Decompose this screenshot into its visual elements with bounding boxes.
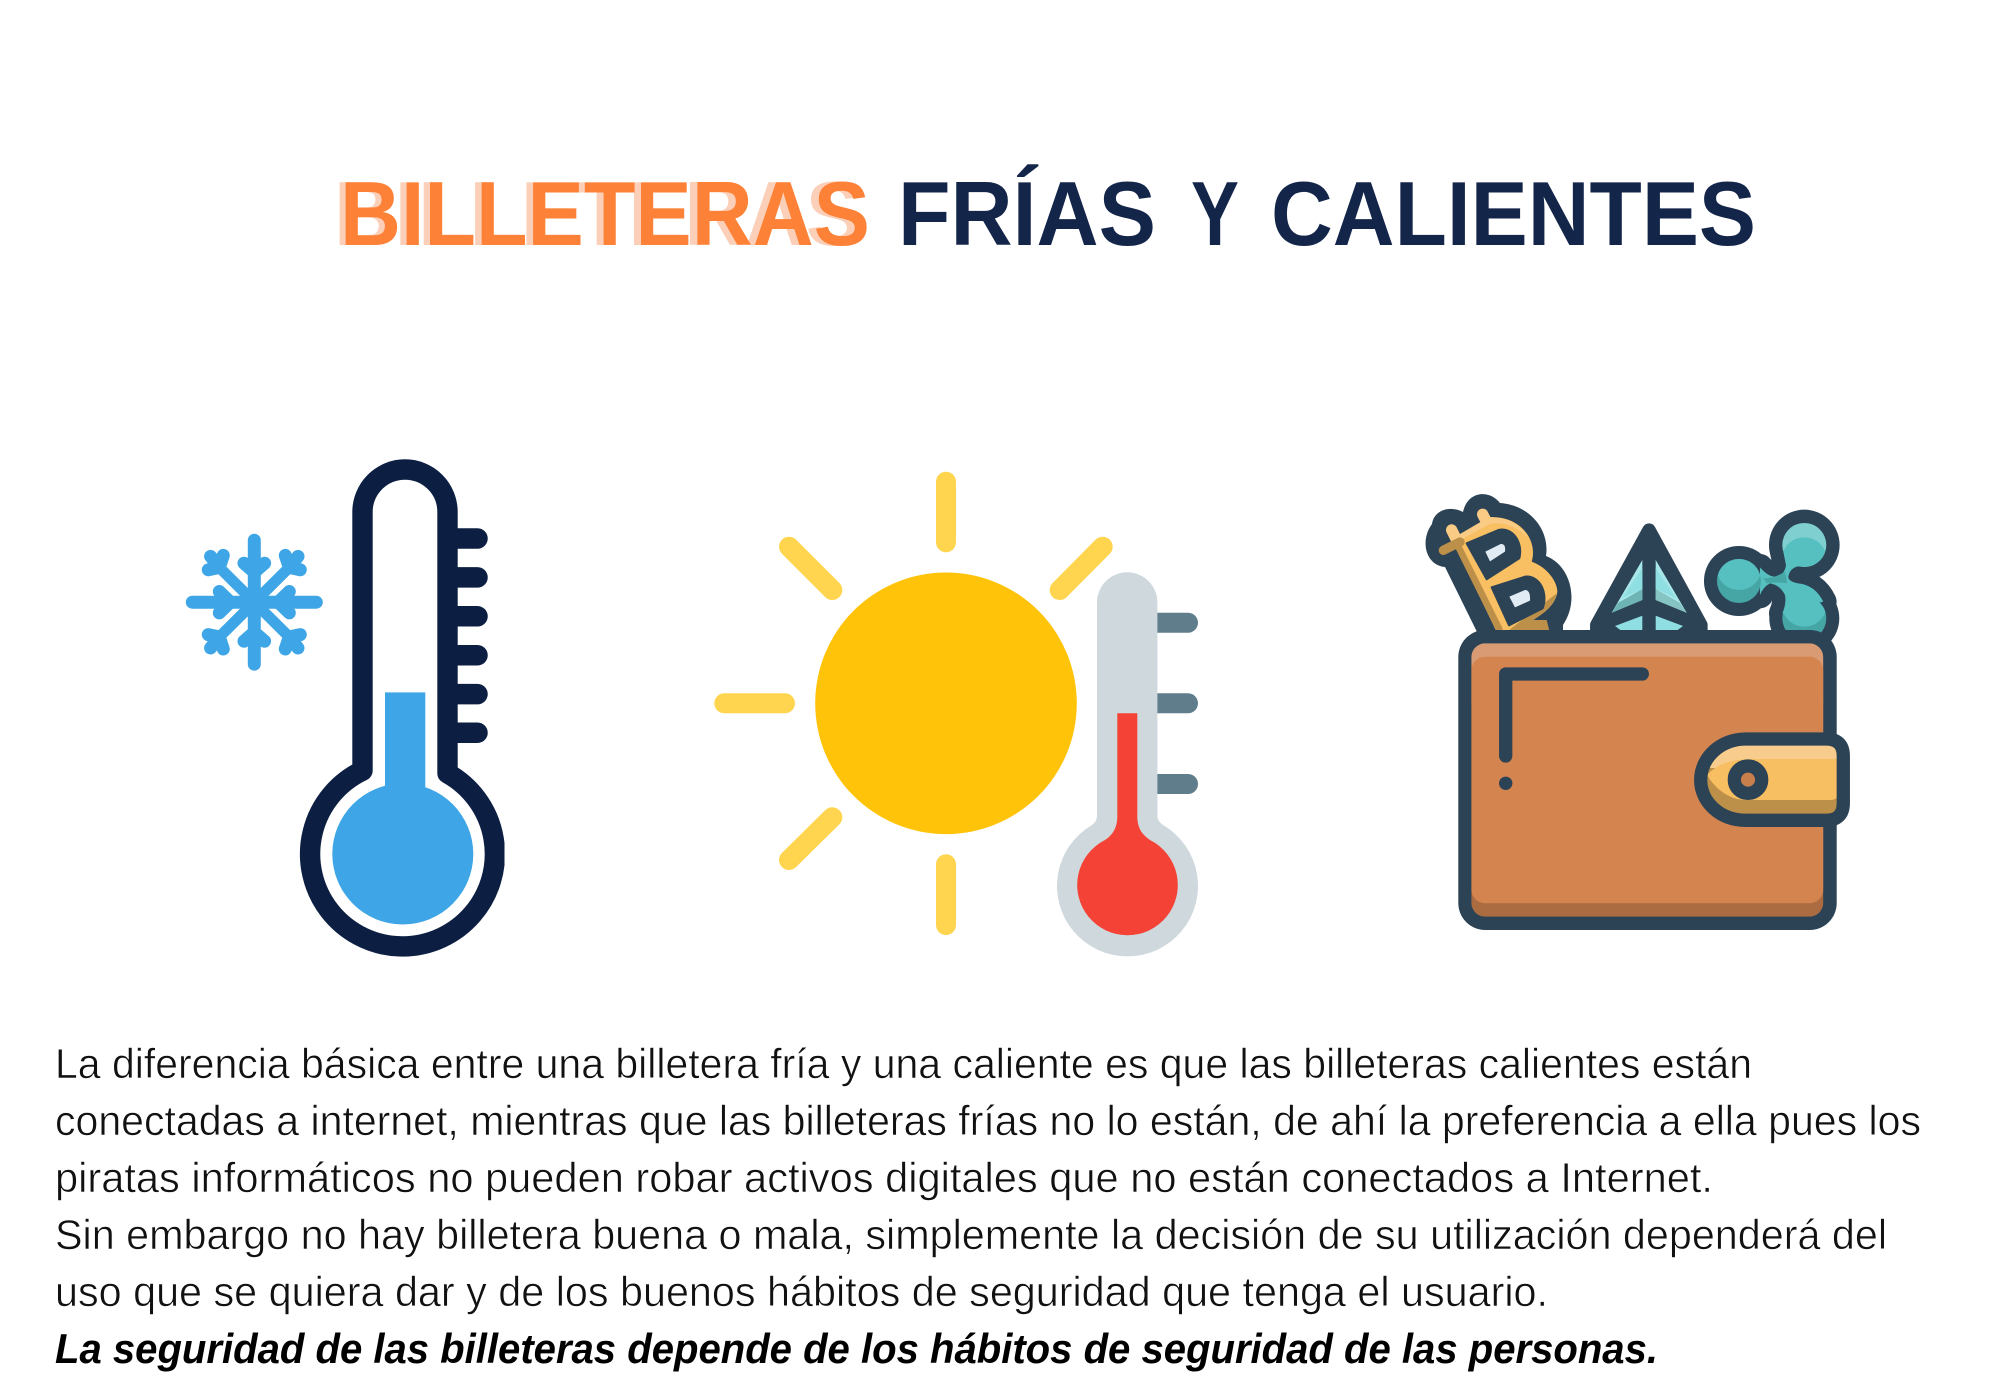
ethereum coin (1597, 530, 1701, 634)
body text: uso que se quiera dar y de los buenos hábitos de seguridad que tenga el usuario. (55, 1268, 1548, 1315)
title (334, 164, 1756, 265)
thermometer ticks (1150, 623, 1188, 784)
body text: conectadas a internet, mientras que las billeteras frías no lo están, de ahí la preferencia a ella pues los (55, 1097, 1921, 1144)
bold italic conclusion: La seguridad de las billeteras depende de los hábitos de seguridad de las personas. (55, 1325, 1658, 1372)
body text: La diferencia básica entre una billetera fría y una caliente es que las billeteras calientes están (55, 1040, 1752, 1087)
sun disc (815, 572, 1077, 834)
blue liquid (332, 692, 473, 924)
bitcoin coin (1426, 494, 1571, 634)
body text: piratas informáticos no pueden robar activos digitales que no están conectados a Internet. (55, 1154, 1713, 1201)
title: FRÍAS (898, 164, 1156, 265)
title: Y (1191, 164, 1239, 265)
title: CALIENTES (1271, 164, 1756, 265)
icon: crypto wallet (1426, 494, 1845, 930)
icon: cold thermometer with snowflake (192, 470, 495, 946)
icon: sun with hot thermometer (724, 482, 1198, 956)
thermometer body (1057, 572, 1198, 956)
body text (55, 1040, 1921, 1315)
sun rays (724, 482, 1103, 925)
snowflake (192, 540, 316, 664)
wallet stitching (1499, 674, 1642, 790)
title: BILLETERAS (340, 164, 870, 265)
wallet body (1458, 630, 1837, 930)
title: BILLETERAS (334, 164, 862, 265)
thermometer outline (310, 470, 495, 946)
body text: Sin embargo no hay billetera buena o mala, simplemente la decisión de su utilización dependerá del (55, 1211, 1887, 1258)
red liquid (1077, 713, 1178, 935)
thermometer scale ticks (450, 538, 478, 733)
ripple coin (1704, 510, 1840, 653)
wallet clasp (1700, 739, 1845, 822)
